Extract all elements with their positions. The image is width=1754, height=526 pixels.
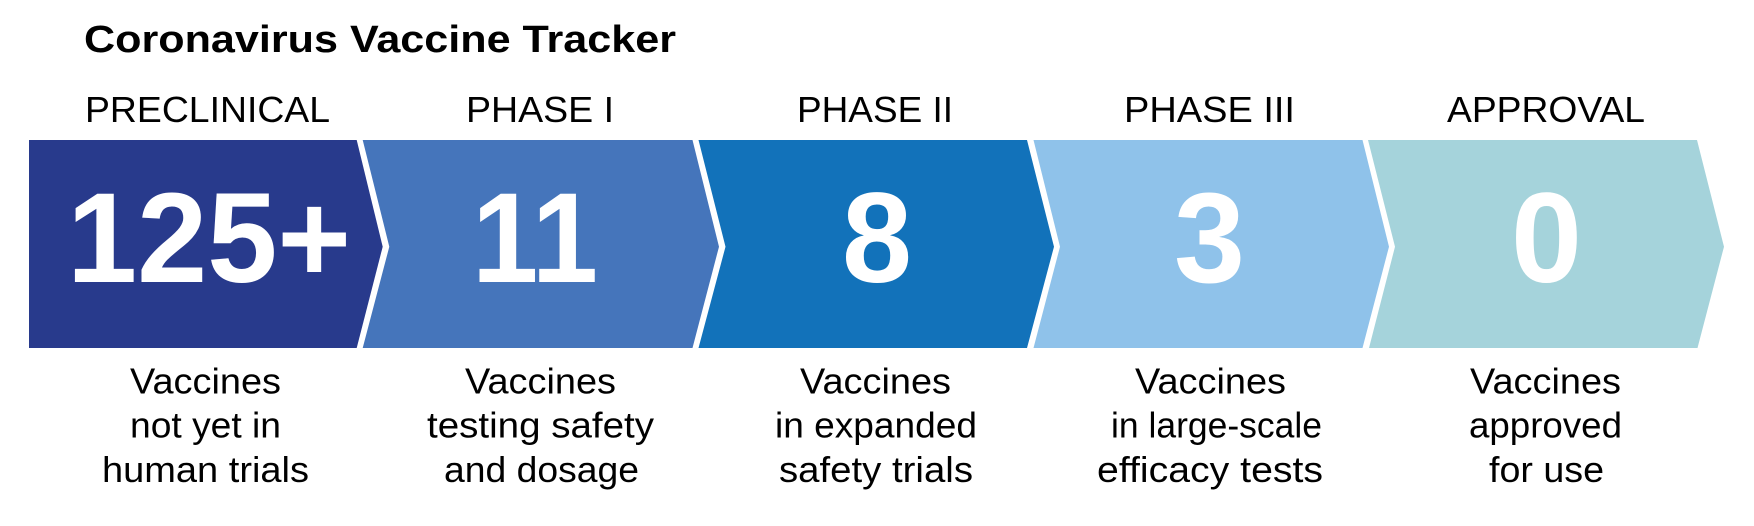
title: Coronavirus Vaccine Tracker <box>84 19 676 61</box>
panel: phase II <box>698 89 1054 490</box>
chevron: phase I <box>363 140 719 348</box>
description: phase I <box>427 360 654 490</box>
chevron: phase II <box>698 140 1054 348</box>
panel: approval <box>1368 89 1724 490</box>
description: preclinical <box>102 360 309 490</box>
description: phase I: Vaccines <box>465 360 616 402</box>
description: phase I: and dosage <box>444 449 639 490</box>
heading: phase I: PHASE I <box>466 89 614 130</box>
description: phase III: efficacy tests <box>1097 449 1323 490</box>
description: approval <box>1469 360 1622 490</box>
description: preclinical: not yet in <box>130 404 281 446</box>
number: 8: 8 <box>842 167 912 310</box>
description: preclinical: Vaccines <box>130 360 281 402</box>
heading: preclinical: PRECLINICAL <box>85 89 330 130</box>
heading: phase II: PHASE II <box>797 89 953 130</box>
description: phase II: Vaccines <box>800 360 951 402</box>
number: 125+: 125+ <box>67 167 351 310</box>
description: phase II: in expanded <box>775 404 977 446</box>
number: 11: 11 <box>472 167 598 310</box>
description: phase I: testing safety <box>427 404 654 446</box>
description: approval: Vaccines <box>1470 360 1621 402</box>
description: phase III: in large-scale <box>1111 404 1322 446</box>
description: approval: for use <box>1489 449 1604 490</box>
heading: phase III: PHASE III <box>1124 89 1295 130</box>
number: 0: 0 <box>1511 167 1582 310</box>
panel: phase III <box>1034 89 1389 490</box>
chevron: phase III <box>1034 140 1389 348</box>
number: 3: 3 <box>1174 167 1245 310</box>
description: phase III: Vaccines <box>1135 360 1286 402</box>
heading: approval: APPROVAL <box>1447 89 1645 130</box>
chevron: approval <box>1368 140 1724 348</box>
chevron: preclinical <box>29 140 383 348</box>
panel: preclinical stage <box>29 89 383 490</box>
panel: phase I <box>363 89 719 490</box>
description: phase II <box>775 360 977 490</box>
description: preclinical: human trials <box>102 449 309 490</box>
description: approval: approved <box>1469 404 1622 446</box>
description: phase II: safety trials <box>779 449 973 490</box>
description: phase III <box>1097 360 1323 490</box>
